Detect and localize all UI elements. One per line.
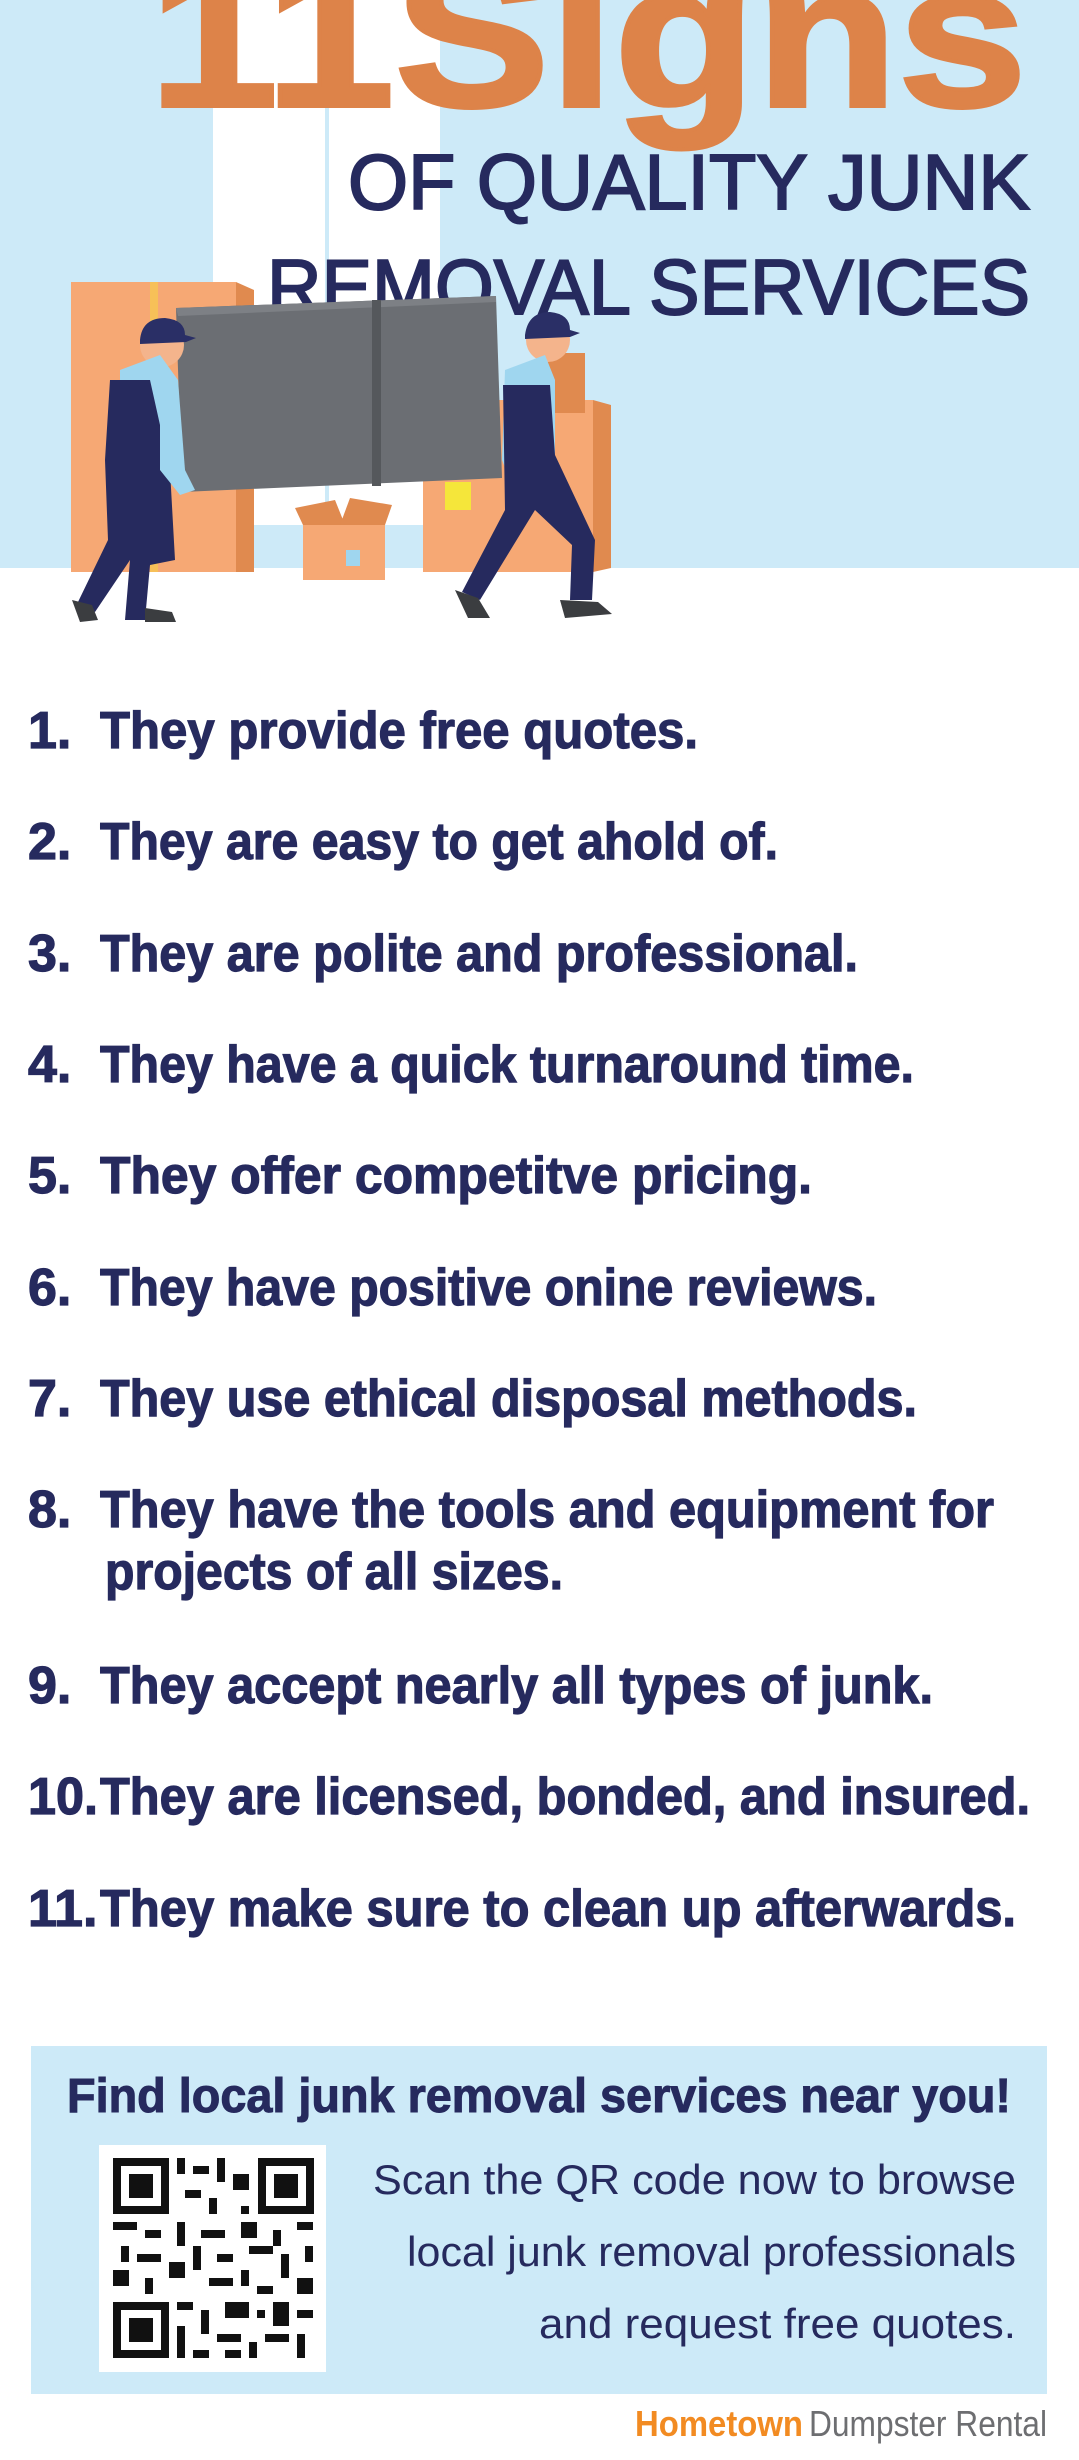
CTA body text: Scan the QR code now to browse [373,2156,1016,2203]
item 9: 9. [28,1657,71,1715]
CTA body text [373,2156,1016,2347]
mover left [72,318,196,622]
item 3: They are polite and professional. [100,925,858,983]
illustration: movers carrying TV [71,282,612,622]
header background [0,0,1079,568]
list of 11 signs [28,702,1030,1938]
item 10: 10. [28,1768,98,1826]
footer logo: Hometown [635,2403,803,2444]
item 8 [28,1481,994,1601]
item 6: 6. [28,1259,71,1317]
item 7: 7. [28,1370,71,1428]
item 10: They are licensed, bonded, and insured. [100,1768,1030,1826]
item 11: 11. [28,1880,97,1938]
mover right [455,312,612,618]
item 8: projects of all sizes. [105,1543,563,1601]
item 11: They make sure to clean up afterwards. [100,1880,1016,1938]
subtitle [267,138,1030,331]
item 4: They have a quick turnaround time. [100,1036,914,1094]
CTA panel [31,2046,1047,2394]
footer logo: Dumpster Rental [809,2403,1047,2444]
CTA body text: local junk removal professionals [407,2228,1016,2275]
QR code [99,2145,326,2372]
item 8: They have the tools and equipment for [100,1481,994,1539]
item 6: They have positive onine reviews. [100,1259,877,1317]
item 8: 8. [28,1481,71,1539]
boxes [71,282,611,580]
CTA body text: and request free quotes. [539,2300,1016,2347]
item 9: They accept nearly all types of junk. [100,1657,933,1715]
item 1: They provide free quotes. [100,702,698,760]
subtitle: REMOVAL SERVICES [267,243,1030,331]
item 2: They are easy to get ahold of. [100,813,778,871]
CTA heading: Find local junk removal services near you! [67,2070,1011,2123]
item 7: They use ethical disposal methods. [100,1370,917,1428]
item 4: 4. [28,1036,71,1094]
subtitle: OF QUALITY JUNK [348,138,1030,226]
item 5: They offer competitve pricing. [100,1147,812,1205]
item 3: 3. [28,925,71,983]
item 1: 1. [28,702,71,760]
footer logo [635,2403,1047,2444]
item 5: 5. [28,1147,71,1205]
item 2: 2. [28,813,71,871]
TV [176,296,502,492]
